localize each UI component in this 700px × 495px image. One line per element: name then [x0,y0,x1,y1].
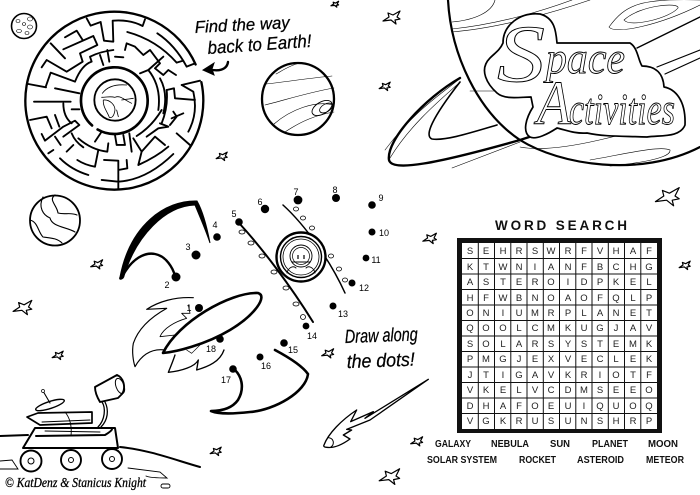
rocket exhaust oval [163,293,261,353]
rocket lower fin [211,350,308,413]
rocket window with astronaut [276,232,326,282]
dot numbers: 12 [359,283,369,293]
grid letters: JTIGAVKRIOTF [468,370,652,381]
signature: © KatDenz & Stanicus Knight [5,476,147,491]
caption: find the way: Find the way [194,13,292,37]
arrow: to maze entrance [203,62,228,75]
dot numbers: 9 [378,193,384,203]
planet: banded planet [262,63,335,135]
word list: GALAXY [435,438,471,450]
dot numbers: 6 [257,197,263,207]
maze outer wall [9,0,220,206]
caption: draw along the dots: the dots! [346,350,416,373]
caption: find the way: back to Earth! [207,31,312,58]
word search grid [457,238,662,433]
dot numbers: 13 [338,309,348,319]
dot numbers: 3 [185,242,191,252]
maze walls: upper half [28,18,200,132]
dot numbers: 15 [288,345,298,355]
word list [427,438,684,466]
logo: Space Activities [484,8,685,138]
word search heading: WORD SEARCH [495,218,627,233]
rover body [23,428,118,448]
rover dish [35,390,65,413]
rover wheels [20,449,122,472]
grid letters: SEHRSWRFVHAF [467,246,652,257]
word list: MOON [648,438,678,450]
comet [324,379,428,448]
numbered dots [172,194,376,373]
planet: large ringed planet [385,0,700,168]
grid letters: VKELVCDMSEEO [467,385,653,396]
word list: METEOR [646,454,684,466]
rocket hull lines [239,223,313,322]
planet: left small planet [30,195,80,246]
grid letters: PMGJEXVECLEK [467,354,653,365]
moon: small cratered moon [12,14,36,38]
grid letters: VGKRUSUNSHRP [467,416,652,427]
maze walls: lower half [30,90,190,188]
maze centre: Earth [94,79,136,121]
grid letters: HFWBNOAOFQLP [467,293,652,304]
caption: draw along the dots: Draw along [344,324,418,348]
grid letters: ASTEROIDPKEL [467,277,652,288]
dot numbers: 16 [261,361,271,371]
dot numbers: 11 [371,255,381,265]
dot numbers: 1 [186,303,192,313]
title: Space Activities text: pace [543,34,625,83]
grid letters: ONIUMRPLANET [466,308,652,319]
word list: SOLAR SYSTEM [427,454,497,466]
maze inner wall [67,54,161,148]
dot numbers: 7 [293,187,299,197]
dot numbers: 14 [307,331,317,341]
grid letters: DHAFOEUIQUOQ [467,401,653,412]
rocket flames [133,298,224,372]
title: Space Activities text: S [497,8,545,99]
word list: ASTEROID [577,454,624,466]
ground: moon surface [0,435,200,488]
rover [20,375,126,472]
planet ring [389,17,700,166]
word list: SUN [550,438,570,450]
dot numbers: 4 [212,220,218,230]
rocket guide dots [239,207,348,320]
caption: draw along the dots [344,324,418,373]
rocket upper fin [120,201,210,279]
title: Space Activities text: A [533,70,572,138]
grid letters: SOLARSYSTEMK [467,339,653,350]
dot numbers: 17 [221,375,231,385]
grid letters: KTWNIANFBCHG [467,262,653,273]
dot numbers: 8 [332,185,338,195]
dot numbers [164,185,389,385]
dot numbers: 2 [164,280,170,290]
rover camera [95,375,126,427]
grid letters [466,246,653,427]
word list: PLANET [592,438,629,450]
dot numbers: 5 [231,209,237,219]
caption: find the way [194,13,312,58]
connect the dots: rocket [120,185,389,413]
word list: NEBULA [491,438,529,450]
grid letters: QOOLCMKUGJAV [466,323,653,334]
title: Space Activities text [497,8,675,138]
dot numbers: 18 [206,344,216,354]
rover upper deck [27,412,92,425]
word list: ROCKET [519,454,556,466]
maze: circular labyrinth [9,0,220,206]
dot numbers: 10 [379,228,389,238]
